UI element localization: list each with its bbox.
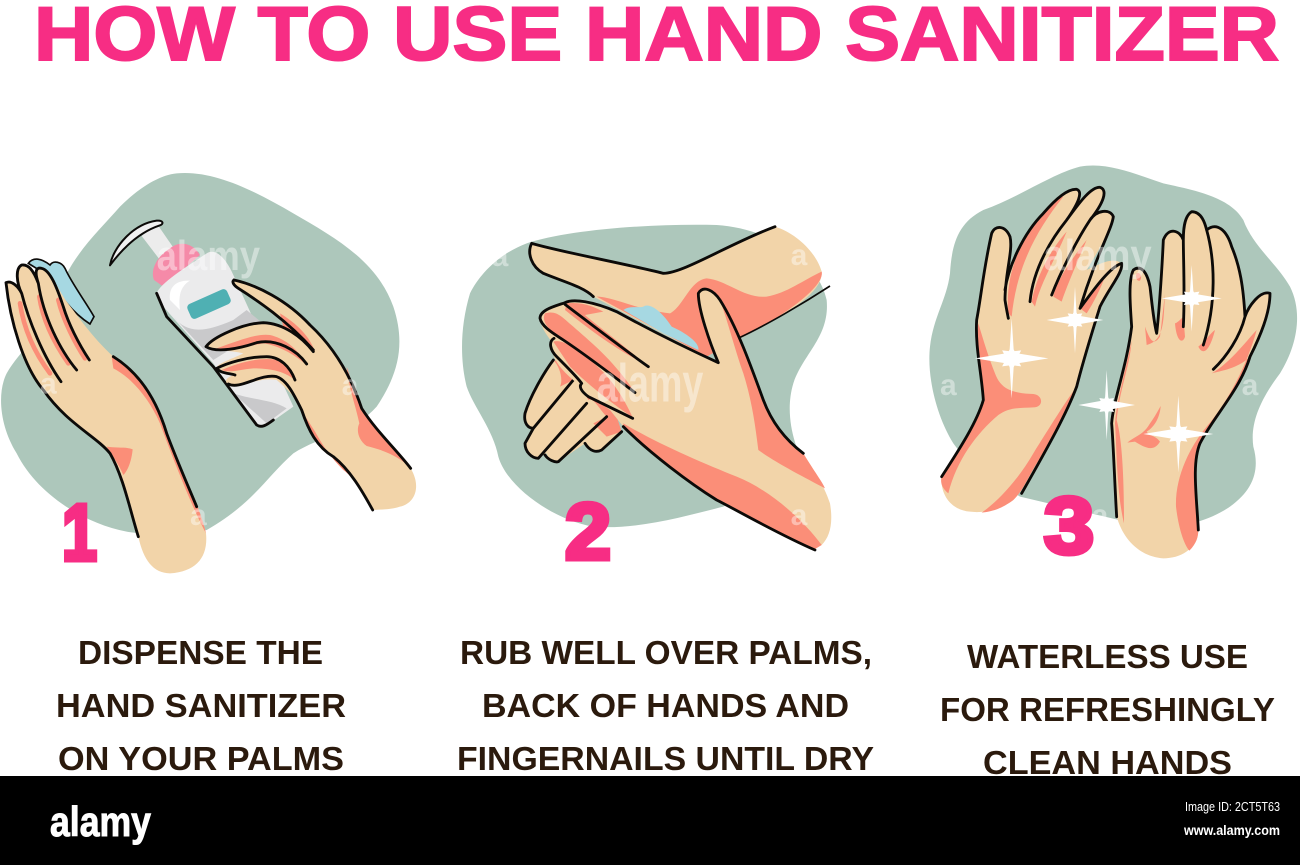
caption: step 1: HAND SANITIZER [56,687,346,724]
rear hand fingers [525,360,622,462]
icon: sanitizer bottle [110,221,293,427]
caption: step 2: FINGERNAILS UNTIL DRY [457,740,874,777]
watermark: alamy [1043,232,1152,280]
caption: step 3: WATERLESS USE [967,638,1248,675]
watermark marks [40,367,359,532]
blob: step 2 background [462,225,827,527]
watermark: alamy [157,232,260,279]
caption: step 3: CLEAN HANDS [983,744,1232,781]
panel: step 1 dispense [1,173,416,573]
step number 2: 2 [565,487,611,576]
caption: step 2: BACK OF HANDS AND [482,687,849,724]
image id: Image ID: 2CT5T63 [1185,799,1280,814]
caption: step 1: ON YOUR PALMS [58,740,344,777]
icon: sanitizer gel on hand [623,305,698,350]
caption: step 2 [457,634,874,777]
watermark marks: a [342,369,359,402]
watermark marks: a [190,499,207,532]
caption: step 2: RUB WELL OVER PALMS, [460,634,872,671]
footer bar [0,776,1300,865]
panel: step 2 rub [462,225,831,550]
step number 1: 1 [62,488,97,577]
right hand gripping bottle [206,280,416,510]
watermark marks [940,369,1259,532]
watermark marks: a [492,240,509,273]
caption: step 1: DISPENSE THE [78,634,323,671]
blob: step 1 background [1,173,399,535]
watermark marks: a [40,367,57,400]
icon: sparkle 4 [1162,265,1222,332]
website: www.alamy.com [1183,823,1280,838]
icon: sparkle 5 [1143,396,1213,472]
watermark marks: a [791,499,808,532]
watermark marks: a [791,239,808,272]
icon: sparkle 2 [1047,287,1103,353]
caption: step 3: FOR REFRESHINGLY [940,691,1275,728]
caption: step 3 [940,638,1275,781]
icon: sparkle 3 [1078,370,1135,440]
icon: sparkle 1 [975,318,1048,398]
panel: step 3 clean hands [929,165,1297,558]
watermark marks [492,239,808,532]
watermark marks: a [1242,369,1259,402]
left hand [6,265,206,573]
watermark: alamy [597,355,704,414]
left clean hand [941,187,1122,513]
upper hand and arm [530,227,830,357]
watermark marks: a [1092,499,1109,532]
icon: sanitizer gel [28,259,94,324]
front hand [540,289,831,550]
caption: step 1 [56,634,346,777]
step number 3: 3 [1044,481,1094,570]
watermark marks: a [940,369,957,402]
right clean hand [1112,212,1270,558]
footer logo: alamy [50,798,152,845]
blob: step 3 background [929,165,1297,526]
